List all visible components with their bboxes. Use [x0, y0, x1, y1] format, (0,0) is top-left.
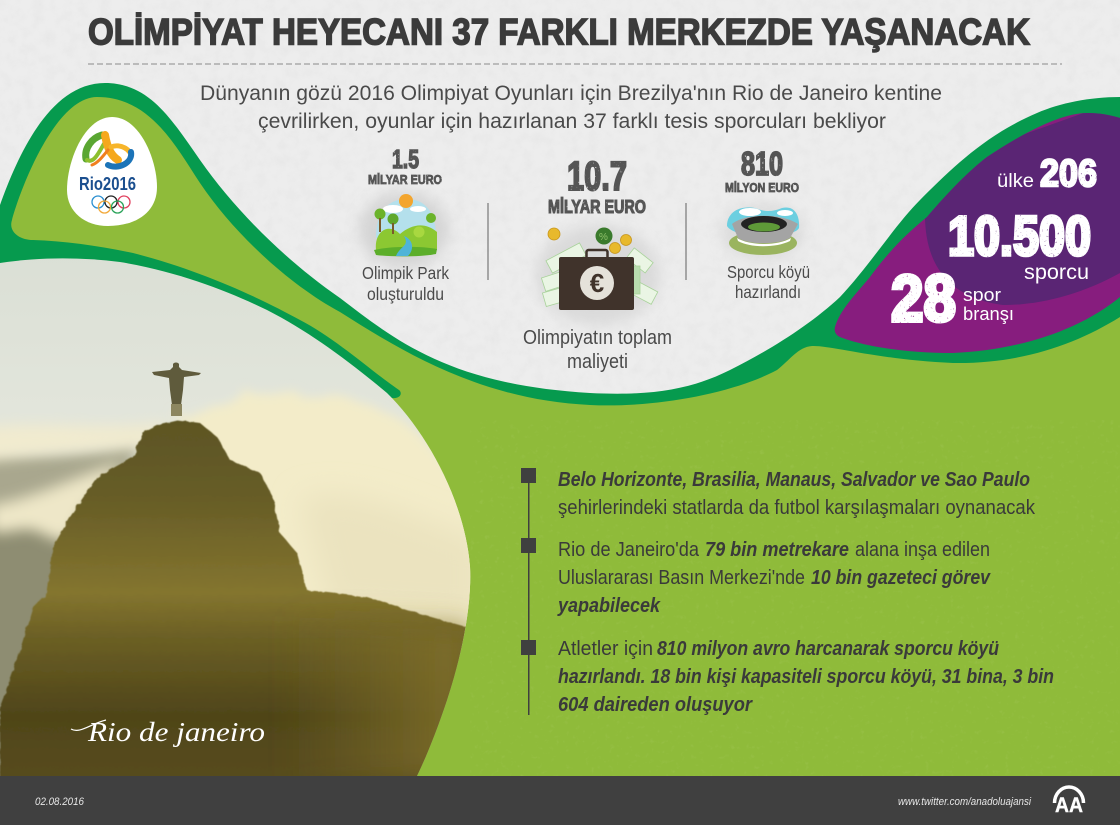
statue [152, 362, 201, 416]
stat: countries: ülke [997, 171, 1034, 192]
amount [725, 145, 799, 195]
title: OLİMPİYAT HEYECANI 37 FARKLI MERKEZDE YAŞANACAK [88, 12, 1030, 52]
stat: sports: branşı [963, 304, 1014, 324]
flourish of caption [71, 720, 106, 730]
label [523, 327, 672, 373]
banknotes [541, 243, 658, 306]
handle [586, 250, 608, 259]
label [727, 262, 810, 302]
cost item: total cost [523, 153, 672, 373]
stat: countries: 206 [1040, 153, 1097, 195]
amount: 810 [741, 145, 783, 182]
amount [368, 144, 442, 187]
amount: MİLYAR EURO [548, 197, 646, 217]
stat: sports [891, 261, 1014, 335]
cream cloud band left [0, 422, 170, 462]
stat: athletes: sporcu [1024, 261, 1089, 284]
text block: press centre: alana inşa edilen [855, 539, 990, 561]
amount: 1.5 [392, 144, 419, 174]
stat: sports: 28 [891, 261, 956, 335]
olympic rings [92, 196, 130, 213]
icon: briefcase with money [536, 225, 660, 325]
text block: football cities: şehirlerindeki statlarda da futbol karşılaşmaları oynanacak [558, 497, 1036, 519]
icon: park landscape [359, 192, 449, 268]
cloud bank right [175, 395, 490, 660]
text block: press centre: yapabilecek [557, 595, 661, 617]
stat: athletes: 10.500 [948, 204, 1091, 267]
cream puff left [0, 462, 122, 541]
text block: football cities: Belo Horizonte, Brasilia, Manaus, Salvador ve Sao Paulo [558, 469, 1030, 491]
cost item: athletes village [721, 145, 810, 302]
grey haze left [0, 520, 62, 776]
stat: sports: spor [963, 285, 1001, 305]
stat: athletes [948, 204, 1091, 284]
footer bar [0, 776, 1120, 825]
text block: football cities [558, 469, 1036, 519]
coins [548, 228, 632, 254]
text block: athletes village [558, 638, 1054, 716]
stat: countries [997, 153, 1097, 195]
text block: athletes village: 810 milyon avro harcanarak sporcu köyü [657, 638, 999, 660]
mountain silhouette [0, 420, 470, 780]
date: 02.08.2016 [35, 796, 85, 808]
text block: athletes village: 604 daireden oluşuyor [558, 694, 753, 716]
intro text [200, 82, 942, 133]
amount: MİLYAR EURO [368, 172, 442, 187]
text block: press centre: Uluslararası Basın Merkezi'nde [558, 567, 805, 589]
icon: briefcase with money: € [590, 268, 604, 298]
icon: stadium [721, 204, 805, 260]
bullet timeline [521, 468, 536, 715]
text block: press centre: 79 bin metrekare [705, 539, 849, 561]
case [559, 257, 634, 310]
amount: 10.7 [567, 153, 627, 199]
text block: athletes village: hazırlandı. 18 bin kişi kapasiteli sporcu köyü, 31 bina, 3 bin [558, 666, 1054, 688]
logo: Anadolu Agency: AA [1055, 794, 1083, 817]
cost item: Olympic Park [359, 144, 449, 304]
emblem [86, 135, 131, 167]
label: hazırlandı [735, 282, 801, 302]
caption: Rio de janeiro: Rio de janeiro [87, 717, 265, 747]
percent badge: % [599, 232, 608, 243]
text block: athletes village: Atletler için [558, 638, 653, 660]
label: Olimpik Park [362, 263, 449, 283]
photo: Christ the Redeemer over clouds [0, 250, 490, 800]
amount [548, 153, 646, 217]
label: Olimpiyatın toplam [523, 327, 672, 349]
logo: Rio 2016 [67, 117, 157, 226]
label: Sporcu köyü [727, 262, 810, 282]
text block: press centre: Rio de Janeiro'da [558, 539, 700, 561]
twitter address: www.twitter.com/anadoluajansi [898, 796, 1031, 808]
text block: press centre [557, 539, 992, 617]
amount: MİLYON EURO [725, 180, 799, 195]
wordmark: Rio2016 [79, 174, 136, 194]
label [362, 263, 449, 304]
text block: press centre: 10 bin gazeteci görev [811, 567, 992, 589]
intro text: çevrilirken, oyunlar için hazırlanan 37 farklı tesis sporcuları bekliyor [258, 110, 886, 133]
label: maliyeti [567, 351, 628, 373]
label: oluşturuldu [367, 284, 444, 304]
panel: purple statistics lens [835, 100, 1120, 353]
intro text: Dünyanın gözü 2016 Olimpiyat Oyunları için Brezilya'nın Rio de Janeiro kentine [200, 82, 942, 105]
